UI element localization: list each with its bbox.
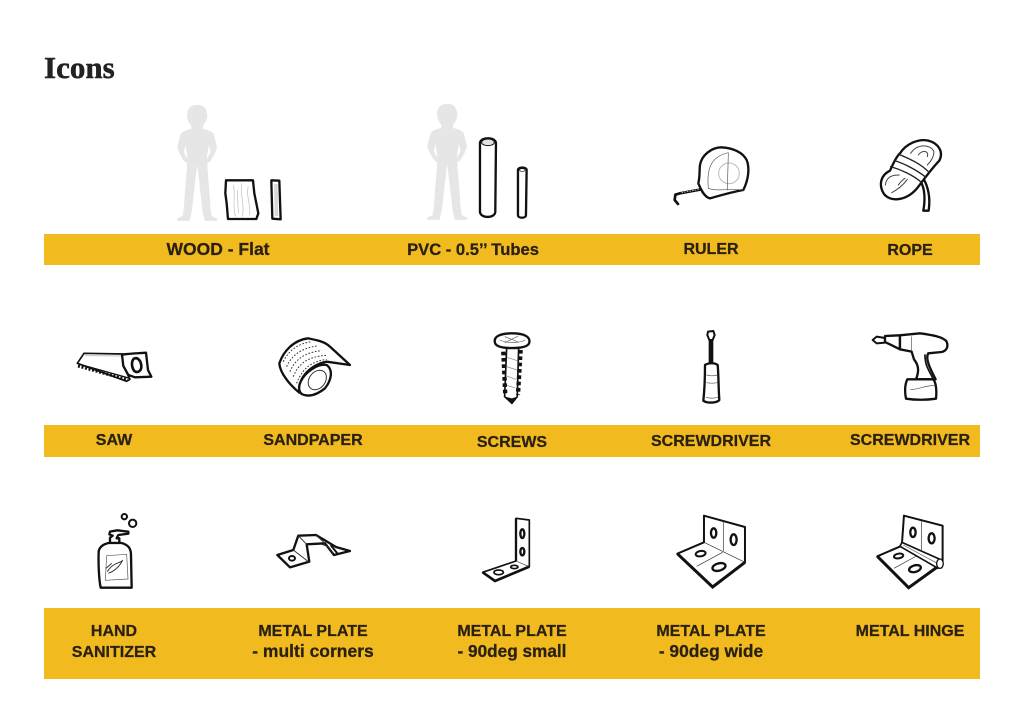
label: hand sanitizer: HAND	[91, 623, 137, 640]
title: Icons	[44, 50, 115, 85]
icon: metal plate 90deg wide	[677, 516, 745, 587]
small tube	[518, 167, 527, 218]
panel: row 3 label bar	[44, 608, 980, 679]
label: saw: SAW	[96, 432, 133, 449]
wood board	[225, 180, 258, 219]
wood plank	[271, 180, 281, 219]
label: metal plate 90deg small: - 90deg small	[458, 641, 566, 661]
icon: metal plate multi corners	[277, 535, 350, 567]
panel: row 2 label bar	[44, 425, 980, 457]
label: metal plate 90deg wide: - 90deg wide	[659, 641, 764, 661]
label: metal hinge: METAL HINGE	[856, 623, 965, 640]
icon: rope coil	[881, 140, 941, 211]
icon: metal plate 90deg small	[483, 518, 529, 581]
label: metal plate multi corners: - multi corners	[252, 641, 374, 661]
icon: person silhouette beside tubes	[427, 104, 467, 220]
icon: hand saw	[77, 353, 151, 381]
icon: person silhouette beside wood	[177, 105, 217, 221]
label: metal plate 90deg wide: METAL PLATE	[656, 623, 766, 640]
icon: metal hinge	[877, 516, 943, 588]
icon: screwdriver	[703, 331, 719, 403]
label: sandpaper: SANDPAPER	[263, 432, 363, 449]
panel: row 1 label bar	[44, 234, 980, 265]
icon: PVC tubes	[480, 138, 527, 218]
icon: hand sanitizer bottle	[99, 514, 136, 588]
icon: screw	[495, 333, 529, 403]
label: wood flat: WOOD - Flat	[166, 239, 270, 259]
icon: wood flat pieces	[225, 180, 281, 219]
label: hand sanitizer: SANITIZER	[72, 644, 157, 661]
label: ruler: RULER	[683, 241, 739, 258]
label: screwdriver: SCREWDRIVER	[651, 433, 771, 450]
label: screws: SCREWS	[477, 434, 547, 451]
label: rope: ROPE	[887, 242, 933, 259]
label: metal plate 90deg small: METAL PLATE	[457, 623, 567, 640]
label: screwdriver (drill): SCREWDRIVER	[850, 432, 970, 449]
icon: tape measure ruler	[675, 147, 748, 204]
icon: sandpaper roll	[279, 338, 350, 395]
label: PVC tubes: PVC - 0.5’’ Tubes	[407, 240, 539, 259]
large tube	[480, 138, 496, 217]
label: metal plate multi corners: METAL PLATE	[258, 623, 368, 640]
icon: cordless drill	[873, 333, 947, 400]
